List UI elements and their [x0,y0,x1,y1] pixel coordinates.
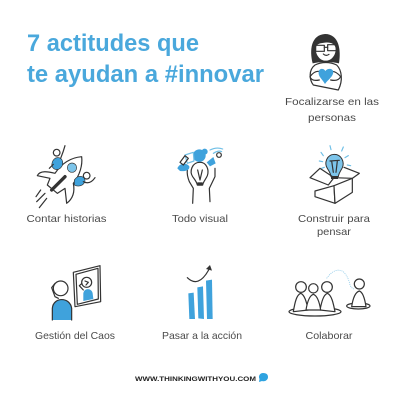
panel: focalizarse en las personas [285,34,379,124]
label: Todo visual [172,213,228,225]
panel: construir para pensar: pensar [317,226,352,238]
icon: person looking in mirror [52,266,101,320]
panel: construir para pensar [298,146,370,238]
label: Construir para [298,213,370,225]
icon: speech bubble [259,373,268,382]
title [27,30,264,88]
title: 7 actitudes que [27,30,199,57]
panel: todo visual [172,148,228,225]
icon: lightbulb in open box [310,146,359,203]
label: Focalizarse en las [285,96,379,108]
icon: lightbulb head with ideas [177,148,223,203]
title: te ayudan a #innovar [27,61,264,88]
icon: rising bars with arrow [187,265,213,319]
panel: gestión del caos [35,266,115,342]
panel: colaborar [289,270,370,342]
icon: group and person connected [289,270,370,316]
footer: website: WWW.THINKINGWITHYOU.COM [135,376,256,383]
footer: website [135,373,268,383]
panel: focalizarse en las personas: personas [308,112,356,124]
label: Contar historias [26,213,106,225]
icon: person holding heart [310,34,341,90]
label: Gestión del Caos [35,330,115,342]
panel: pasar a la acción [162,265,242,342]
panel: contar historias [26,146,106,225]
icon: rocket with two people [36,146,95,208]
label: Colaborar [306,330,353,342]
label: Pasar a la acción [162,330,242,342]
